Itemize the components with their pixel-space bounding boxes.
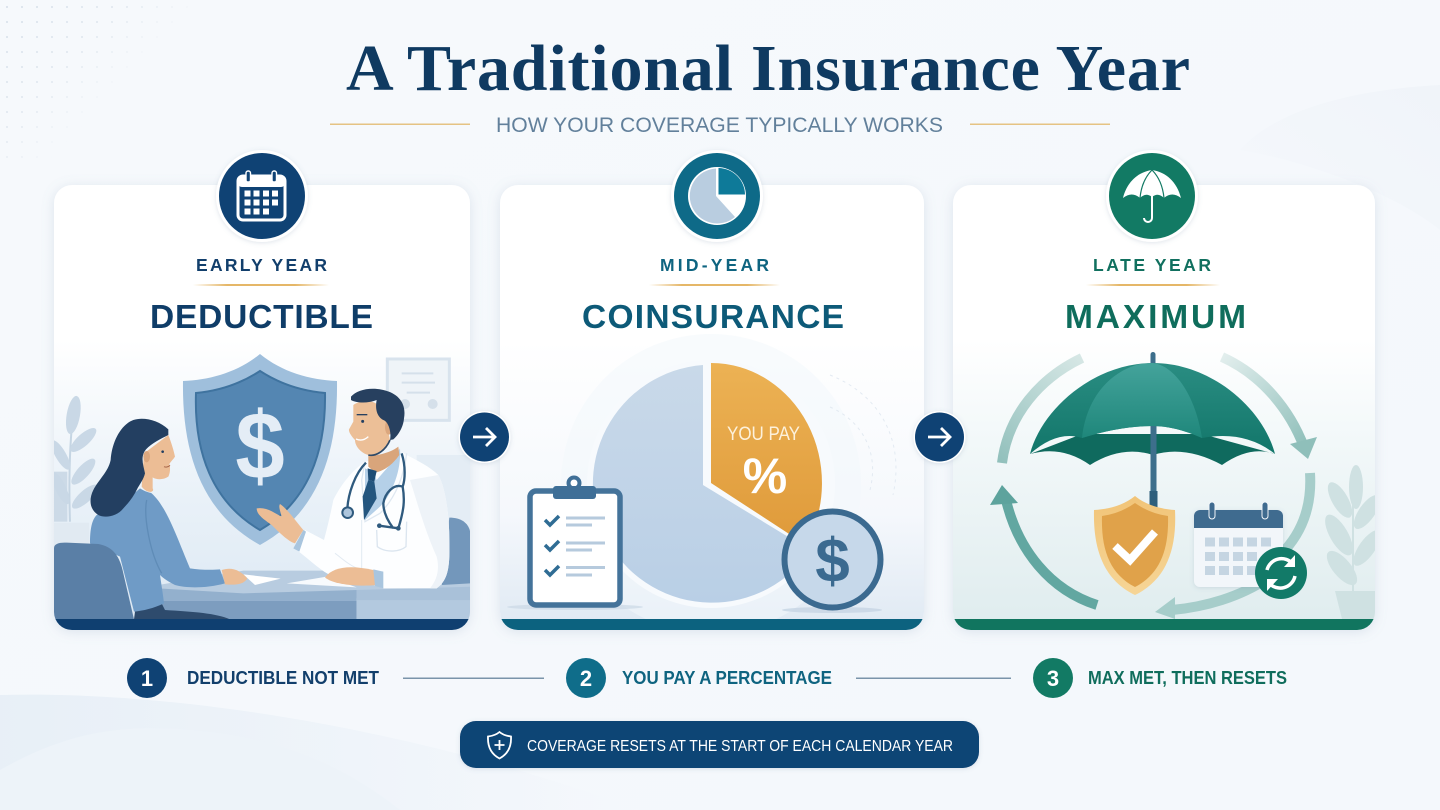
patient chair xyxy=(54,543,134,619)
certificate xyxy=(387,359,449,420)
pie chart xyxy=(587,360,835,608)
step 1: 1 xyxy=(141,666,153,691)
arrow: deductible to coinsurance xyxy=(458,411,510,463)
doctor xyxy=(257,389,449,588)
pie chart: % xyxy=(743,448,787,504)
label: mid-year: MID-YEAR xyxy=(660,255,769,275)
cycle arrows xyxy=(1002,357,1310,610)
coin: $ xyxy=(815,527,850,596)
heading: coinsurance: COINSURANCE xyxy=(582,299,844,336)
reset badge xyxy=(1255,547,1307,599)
panel: early year deductible xyxy=(48,150,473,630)
step 3: 3 xyxy=(1047,666,1059,691)
heading: maximum: MAXIMUM xyxy=(1065,299,1246,336)
step 2 xyxy=(566,658,832,698)
label: early year: EARLY YEAR xyxy=(196,255,327,275)
accent bar xyxy=(953,619,1375,630)
background xyxy=(0,6,300,770)
table xyxy=(158,571,472,619)
icon: shield plus xyxy=(488,732,511,758)
panel: mid-year coinsurance xyxy=(500,150,924,634)
step 3: MAX MET, THEN RESETS xyxy=(1088,668,1287,688)
step 1: DEDUCTIBLE NOT MET xyxy=(187,668,379,688)
clipboard xyxy=(507,478,643,610)
step 3 xyxy=(1033,658,1287,698)
icon: pie xyxy=(671,150,763,242)
calendar xyxy=(1194,502,1283,587)
coin xyxy=(782,512,882,613)
accent bar xyxy=(54,619,470,630)
pie chart: YOU PAY xyxy=(727,423,800,445)
plant xyxy=(1325,465,1375,619)
plant xyxy=(54,396,96,522)
title: A Traditional Insurance Year xyxy=(346,32,1190,105)
accent bar xyxy=(500,619,924,630)
icon: calendar xyxy=(216,150,308,242)
step 2: 2 xyxy=(580,666,592,691)
callout: coverage resets: COVERAGE RESETS AT THE START OF EACH CALENDAR YEAR xyxy=(527,738,953,755)
shield with dollar: $ xyxy=(235,392,285,499)
panel: late year maximum xyxy=(953,150,1386,630)
shield with dollar xyxy=(183,354,337,545)
umbrella xyxy=(1030,352,1275,508)
callout: coverage resets xyxy=(460,721,979,768)
label: late year: LATE YEAR xyxy=(1093,255,1211,275)
woman xyxy=(90,419,247,619)
gold shield xyxy=(1094,496,1175,595)
step 1 xyxy=(127,658,379,698)
icon: umbrella xyxy=(1106,150,1198,242)
right chair xyxy=(442,518,471,585)
step 2: YOU PAY A PERCENTAGE xyxy=(622,668,832,688)
heading: deductible: DEDUCTIBLE xyxy=(150,299,373,336)
subtitle: HOW YOUR COVERAGE TYPICALLY WORKS xyxy=(496,114,943,137)
arrow: coinsurance to maximum xyxy=(914,411,966,463)
